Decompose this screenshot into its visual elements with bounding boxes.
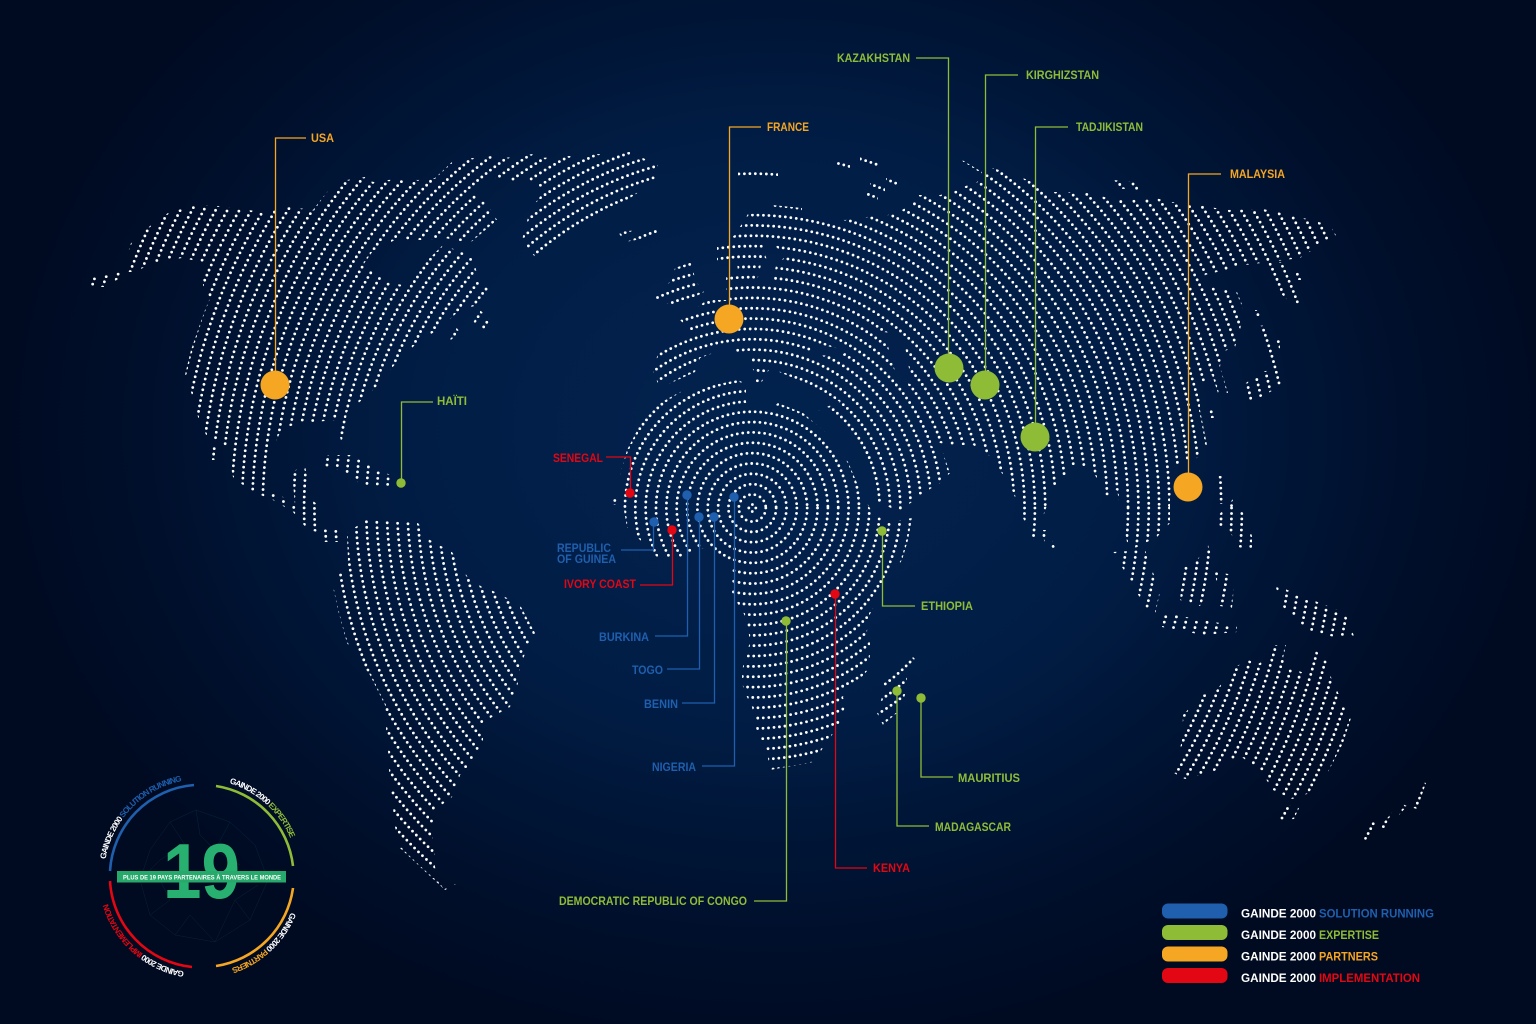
callout: Burkina (599, 490, 692, 644)
dotted world map (91, 152, 1426, 890)
callout: Nigeria (652, 492, 739, 774)
badge: 19 partner countries: GAINDE 2000 EXPERTISE (230, 778, 296, 838)
legend item: expertise: GAINDE 2000 (1241, 928, 1316, 942)
callout: Democratic Republic of Congo: DEMOCRATIC REPUBLIC OF CONGO (559, 896, 747, 908)
legend item: partners: PARTNERS (1319, 950, 1378, 964)
badge: 19 partner countries: 19 (163, 827, 240, 915)
callout: USA (260, 133, 334, 400)
callout: Kirghizstan: KIRGHIZSTAN (1026, 70, 1099, 82)
callout: Malaysia (1174, 169, 1285, 502)
badge: 19 partner countries: GAINDE 2000 SOLUTION RUNNING (100, 776, 182, 858)
callout: Kirghizstan (970, 70, 1099, 400)
callout: Republic of Guinea (557, 517, 659, 566)
callout: Kazakhstan: KAZAKHSTAN (837, 53, 910, 65)
callout: Burkina: BURKINA (599, 632, 649, 644)
legend item: solution running (1162, 904, 1434, 920)
badge: 19 partner countries: GAINDE 2000 PARTNERS (232, 913, 296, 973)
badge: 19 partner countries: PLUS DE 19 PAYS PARTENAIRES À TRAVERS LE MONDE (123, 872, 282, 882)
legend item: implementation: GAINDE 2000 (1241, 971, 1316, 985)
callout: Haiti (396, 395, 467, 488)
callout: Ivory Coast: IVORY COAST (564, 579, 636, 591)
callout: Ivory Coast (564, 525, 677, 591)
callout: Kazakhstan (837, 53, 964, 382)
callout: Ethiopia: ETHIOPIA (921, 601, 973, 613)
legend item: solution running: GAINDE 2000 (1241, 906, 1316, 920)
badge: 19 partner countries: GAINDE 2000 IMPLEMENTATION (102, 904, 184, 976)
legend item: expertise: EXPERTISE (1319, 928, 1379, 942)
callout: Madagascar: MADAGASCAR (935, 822, 1012, 834)
callout: Kenya (830, 589, 910, 875)
callout: Democratic Republic of Congo (559, 616, 791, 908)
callout: USA: USA (311, 133, 334, 145)
callout: Kenya: KENYA (873, 863, 910, 875)
legend item: partners (1162, 946, 1378, 964)
callout: Ethiopia (877, 526, 973, 613)
callout: Mauritius (916, 693, 1020, 785)
legend item: implementation: IMPLEMENTATION (1319, 971, 1420, 985)
callout: Togo: TOGO (632, 665, 663, 677)
callout: France: FRANCE (767, 122, 809, 134)
callout: Senegal (553, 453, 635, 498)
callout: Republic of Guinea: OF GUINEA (557, 554, 616, 566)
callout: Tadjikistan (1020, 122, 1143, 452)
callout: Republic of Guinea: REPUBLIC (557, 543, 611, 555)
legend item: partners: GAINDE 2000 (1241, 950, 1316, 964)
badge: 19 partner countries (100, 776, 296, 976)
callout: France (714, 122, 809, 334)
callout: Togo (632, 512, 704, 677)
legend (1162, 904, 1434, 985)
legend item: expertise (1162, 925, 1379, 942)
legend item: solution running: SOLUTION RUNNING (1319, 906, 1434, 920)
callout: Benin: BENIN (644, 699, 678, 711)
legend item: implementation (1162, 968, 1420, 985)
callout: Nigeria: NIGERIA (652, 762, 696, 774)
callout: Madagascar (892, 686, 1012, 834)
callout: Haiti: HAÏTI (437, 395, 467, 408)
callout: Tadjikistan: TADJIKISTAN (1076, 122, 1143, 134)
callout: Malaysia: MALAYSIA (1230, 169, 1285, 181)
callout: Benin (644, 512, 719, 711)
callout: Mauritius: MAURITIUS (958, 773, 1020, 785)
callout: Senegal: SENEGAL (553, 453, 603, 465)
